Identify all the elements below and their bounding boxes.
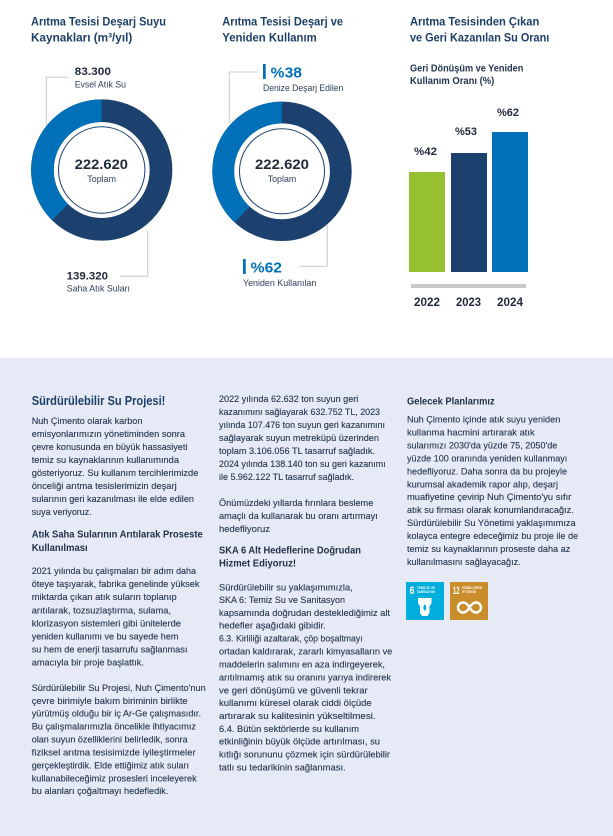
text block: SDG 6 targets: ortadan kaldırarak, zararlı kimyasalların ve — [219, 646, 392, 657]
bar: 2023: %53 — [455, 126, 477, 138]
text block: savings: kazanımını sağlayarak 632.752 TL, 2023 — [219, 407, 380, 418]
heading: treated site water use — [32, 529, 203, 554]
text block: introduction: temiz su kaynaklarının kullanımında — [32, 455, 180, 466]
heading: sustainable water project: Sürdürülebilir Su Projesi! — [32, 394, 165, 408]
icon: SDG 6 clean water and sanitation: TEMİZ SU VE — [417, 586, 436, 590]
text block: project background: öteye taşıyarak, fabrika genelinde yüksek — [32, 579, 200, 590]
text block: future plans: Sürdürülebilir Su Yönetimi yaklaşımımıza — [407, 518, 576, 529]
text block: project background: su hem de enerji tasarrufu sağlanması — [32, 644, 187, 655]
heading: recovered water rate — [410, 15, 549, 45]
callout: domestic wastewater: 83.300 — [75, 66, 111, 78]
text block: future plans: atık su firması olarak konumlandıracağız. — [407, 505, 574, 516]
panel: discharge and reuse — [199, 15, 365, 288]
icon: SDG 12 responsible consumption and production: VE TÜKETİM — [462, 589, 476, 594]
chart subtitle: Geri Dönüşüm ve Yeniden — [410, 63, 523, 75]
text block: SDG 6 targets: Sürdürülebilir su yaklaşımımızla, — [219, 582, 353, 593]
heading: discharge and reuse: Arıtma Tesisi Deşarj ve — [222, 15, 343, 29]
panel: discharge water sources — [18, 15, 186, 294]
donut chart: sources: Toplam — [87, 174, 116, 184]
text block: SDG 6 targets: artırarak su kalitesinin yükseltilmesi. — [219, 711, 376, 722]
text block: future plans: yüzde 100 oranında yeniden kullanmayı — [407, 453, 567, 464]
donut chart: discharge and reuse — [199, 88, 365, 254]
callout: reused: Yeniden Kullanılan — [243, 278, 316, 288]
heading: recovered water rate: Arıtma Tesisinden Çıkan — [410, 15, 539, 29]
bar: 2023: 2023 — [456, 297, 481, 309]
icon: SDG 12 responsible consumption and production: 12 — [453, 585, 460, 597]
callout: domestic wastewater: Evsel Atık Su — [75, 80, 126, 90]
bar: 2024: 2024 — [497, 297, 524, 309]
chart subtitle: Kullanım Oranı (%) — [410, 75, 494, 87]
bar: 2024: %62 — [497, 107, 519, 119]
donut chart: discharge and reuse: 222.620 — [255, 157, 309, 172]
callout: reused — [243, 224, 327, 288]
text block: future plans — [407, 414, 578, 568]
bar: 2023 — [451, 126, 487, 309]
icon: SDG 12 responsible consumption and production — [450, 582, 488, 620]
text block: introduction: çevre konusunda en büyük hassasiyeti — [32, 442, 187, 453]
text block: SDG 6 targets — [219, 582, 392, 774]
heading: SDG 6 targets — [219, 544, 361, 570]
text block: SDG 6 targets: kıtlığı sorununu çözmek için sürdürülebilir — [219, 750, 390, 761]
heading: discharge and reuse: Yeniden Kullanım — [222, 31, 317, 45]
heading: future plans: Gelecek Planlarımız — [407, 396, 495, 408]
bar chart: recycling and reuse rate — [409, 107, 528, 309]
bar: 2024 — [492, 107, 528, 309]
text block: introduction — [32, 416, 198, 518]
callout: discharged to sea: %38 — [271, 65, 302, 82]
text block: project background: gerçekleştirdik. Elde ettiğimiz atık suları — [32, 760, 189, 771]
text block: project background — [32, 566, 206, 797]
text block: savings: yılında 107.476 ton suyun geri kazanımını — [219, 420, 385, 431]
icon: SDG 6 clean water and sanitation — [406, 582, 444, 620]
text block: SDG 6 targets: kullanımı küresel olarak ciddi ölçüde — [219, 698, 372, 709]
chart subtitle — [410, 63, 523, 87]
text block: savings — [219, 394, 386, 535]
bar: 2022: %42 — [414, 146, 437, 158]
column 3 text — [406, 396, 578, 620]
icon: SDG 12 responsible consumption and production: SORUMLU ÜRETİM — [462, 585, 482, 590]
text block: project background: amacıyla bir proje başlattık. — [32, 657, 144, 668]
heading: SDG 6 targets: Hizmet Ediyoruz! — [219, 558, 296, 570]
text block: savings: 2024 yılında 138.140 ton su geri kazanımı — [219, 459, 386, 470]
text block: savings: ile 5.962.122 TL tasarruf sağladık. — [219, 472, 354, 483]
text block: project background: çevre birimiyle bakım biriminin birlikte — [32, 696, 188, 707]
text block: introduction: sularının geri kazanılması ile elde edilen — [32, 494, 194, 505]
panel: recovered water rate — [409, 15, 549, 309]
callout: reused: %62 — [251, 260, 282, 277]
callout: site waste water: 139.320 — [67, 270, 108, 282]
text block: savings: amaçlı da kullanarak bu oranı artırmayı — [219, 511, 378, 522]
text block: future plans: muafiyetine çevirip Nuh Çimento'yu sıfır — [407, 492, 571, 503]
text block: introduction: gösteriyoruz. Su kullanım tercihlerimizde — [32, 468, 198, 479]
text block: project background: Sürdürülebilir Su Projesi, Nuh Çimento'nun — [32, 683, 206, 694]
text block: project background: bu alanları çoğaltmayı hedefledik. — [32, 786, 168, 797]
callout: site waste water: Saha Atık Suları — [67, 284, 130, 294]
callout: site waste water — [67, 231, 148, 294]
text block: SDG 6 targets: arıtılmamış atık su oranını yarıya indirerek — [219, 672, 391, 683]
text block: savings: Önümüzdeki yıllarda fırınlara besleme — [219, 498, 373, 509]
text block: future plans: kolayca entegre edeceğimiz bu proje ile de — [407, 531, 578, 542]
heading: recovered water rate: ve Geri Kazanılan Su Oranı — [410, 31, 549, 45]
text block: project background: miktarda çıkan atık suların toplanıp — [32, 592, 177, 603]
text block: SDG 6 targets: SKA 6: Temiz Su ve Sanitasyon — [219, 595, 345, 606]
text block: future plans: kullanma hacmini artırarak atık — [407, 427, 535, 438]
text block: savings: hedefliyoruz — [219, 524, 270, 535]
text block: project background: olan suyun özelliklerini belirledik, sonra — [32, 734, 188, 745]
text block: future plans: temiz su kaynaklarının proseste daha az — [407, 544, 571, 555]
text block: future plans: hedefliyoruz. Daha sonra da bu projeyle — [407, 466, 567, 477]
donut chart: discharge and reuse: Toplam — [268, 174, 297, 184]
callout: discharged to sea: Denize Deşarj Edilen — [263, 83, 343, 93]
bar: 2022: 2022 — [414, 297, 440, 309]
text block: project background: fiziksel arıtma tesisimizde iyileştirmeler — [32, 747, 196, 758]
text block: SDG 6 targets: maddelerin salımını en aza indirgeyerek, — [219, 659, 385, 670]
text block: SDG 6 targets: tatlı su tedarikinin sağlanması. — [219, 763, 346, 774]
text block: project background: yürütmüş olduğu bir iç Ar-Ge çalışmasıdır. — [32, 709, 201, 720]
text block: project background: 2021 yılında bu çalışmaları bir adım daha — [32, 566, 197, 577]
column 1 text — [32, 394, 206, 797]
text block: SDG 6 targets: kapsamında doğrudan desteklediğimiz alt — [219, 608, 390, 619]
text block: SDG 6 targets: hedefler aşağıdaki gibidir. — [219, 620, 326, 632]
text block: project background: arıtılarak, tozsuzlaştırma, sulama, — [32, 605, 171, 616]
text block: project background: Bu çalışmalarımızla öncelikle ihtiyacımız — [32, 722, 196, 732]
text block: introduction: Nuh Çimento olarak karbon — [32, 416, 142, 427]
text block: introduction: emisyonlarımızın yönetiminden sonra — [32, 429, 186, 440]
text block: savings: sağlayarak suyun metreküpü üzerinden — [219, 433, 379, 444]
text block: future plans: kullanılmasını sağlayacağız. — [407, 557, 521, 568]
heading: treated site water use: Atık Saha Sularının Arıtılarak Proseste — [32, 529, 203, 541]
text block: SDG 6 targets: etkinliğinin büyük ölçüde artırılması, su — [219, 737, 380, 748]
text block: SDG 6 targets: 6.3. Kirliliği azaltarak, çöp boşaltmayı — [219, 634, 363, 644]
heading: discharge water sources: Kaynakları (m³/yıl) — [31, 31, 132, 45]
bar: 2022 — [409, 146, 445, 309]
text block: future plans: kurumsal akademik rapor alıp, deşarj — [407, 479, 558, 490]
callout: domestic wastewater — [46, 66, 126, 125]
text block: project background: yeniden kullanımı ve bu sayede hem — [32, 631, 178, 642]
icon: SDG 6 clean water and sanitation: SANİTASYON — [417, 590, 435, 594]
heading: treated site water use: Kullanılması — [32, 542, 88, 554]
text block: SDG 6 targets: ve geri dönüşümü ve güvenli tekrar — [219, 685, 368, 696]
text block: project background: kullanabileceğimiz prosesleri inceleyerek — [32, 773, 197, 784]
icon: SDG 6 clean water and sanitation: 6 — [410, 585, 414, 597]
text block: future plans: sularımızı 2030'da yüzde 75, 2050'de — [407, 440, 557, 451]
text block: introduction: önceliği arıtma tesislerimizin deşarj — [32, 481, 177, 492]
column 2 text — [219, 394, 392, 774]
text block: future plans: Nuh Çimento içinde atık suyu yeniden — [407, 414, 560, 425]
donut chart: sources — [18, 86, 186, 254]
text block: savings: toplam 3.106.056 TL tasarruf sağladık. — [219, 446, 375, 457]
text block: introduction: suya veriyoruz. — [32, 507, 92, 518]
callout: discharged to sea — [229, 64, 343, 123]
text block: savings: 2022 yılında 62.632 ton suyun geri — [219, 394, 358, 405]
panel: sustainable water project — [0, 358, 613, 836]
heading: discharge water sources: Arıtma Tesisi Deşarj Suyu — [31, 15, 166, 29]
donut chart: sources: 222.620 — [75, 157, 128, 172]
heading: SDG 6 targets: SKA 6 Alt Hedeflerine Doğrudan — [219, 544, 361, 556]
heading: discharge water sources — [31, 15, 166, 45]
text block: SDG 6 targets: 6.4. Bütün sektörlerde su kullanım — [219, 724, 359, 735]
heading: discharge and reuse — [222, 15, 343, 45]
text block: project background: klorizasyon sistemleri gibi ünitelerde — [32, 618, 181, 629]
